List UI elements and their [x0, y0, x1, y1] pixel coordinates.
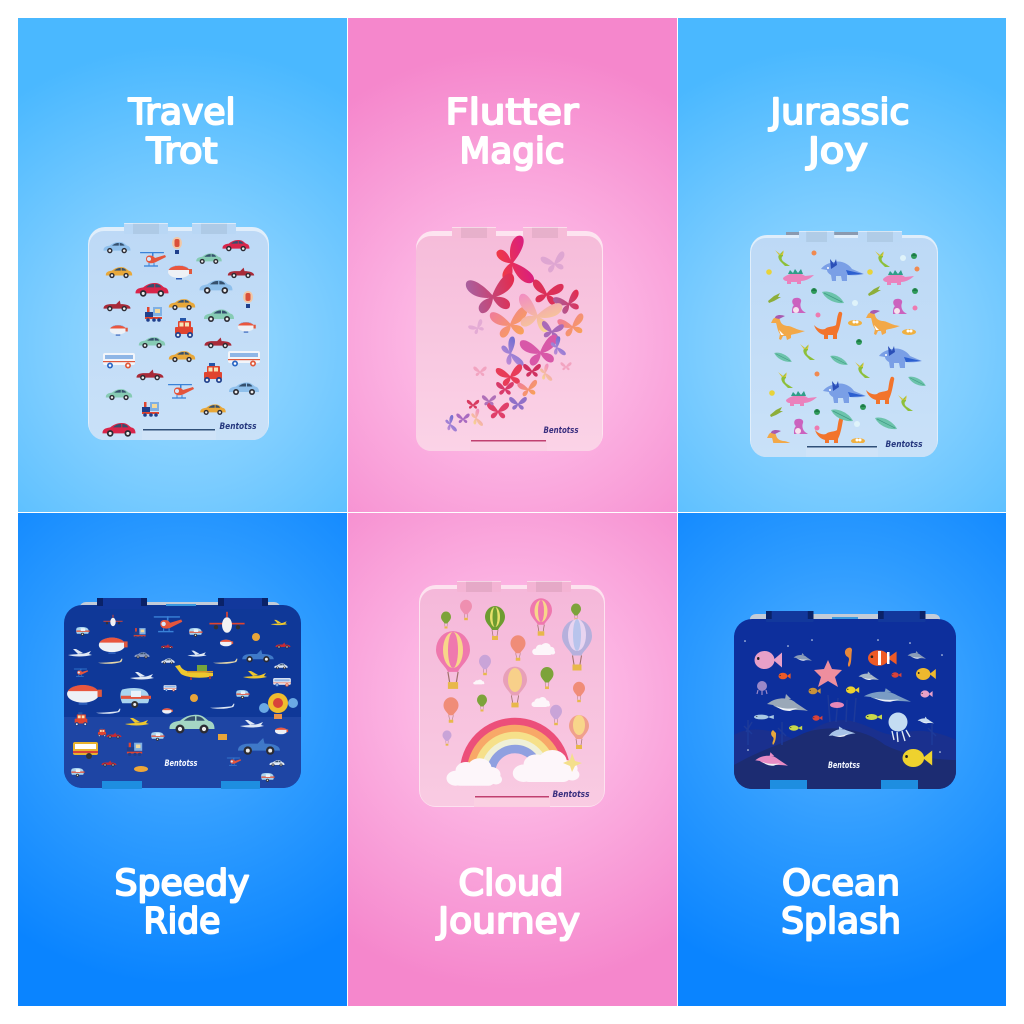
logo: Bentotss — [164, 759, 198, 769]
lunch box: Jurassic Joy — [750, 231, 938, 457]
heading: Cloud Journey — [436, 863, 580, 942]
logo: Bentotss — [886, 440, 923, 450]
heading: Travel Trot: Travel — [128, 92, 236, 133]
logo: Bentotss — [544, 426, 579, 436]
heading: Flutter Magic — [446, 92, 579, 172]
panel: Flutter Magic — [348, 18, 677, 512]
heading: Cloud Journey: Cloud — [458, 863, 564, 904]
dinosaur pattern — [766, 250, 926, 455]
heading: Ocean Splash — [781, 863, 901, 942]
logo: Bentotss — [828, 761, 860, 771]
vehicle pattern — [102, 237, 260, 437]
butterfly pattern — [444, 235, 587, 433]
panel: Travel Trot — [18, 18, 347, 512]
heading: Ocean Splash: Ocean — [782, 863, 900, 904]
vehicle and aircraft pattern — [67, 612, 298, 782]
heading: Jurassic Joy: Jurassic — [768, 92, 910, 133]
logo: Bentotss — [220, 422, 257, 432]
seabed — [734, 695, 956, 790]
panel: Cloud Journey — [348, 513, 677, 1006]
heading: Speedy Ride — [114, 863, 250, 942]
lunch box: Ocean Splash — [734, 611, 956, 790]
logo: Bentotss — [552, 790, 590, 800]
heading: Flutter Magic: Flutter — [446, 92, 579, 133]
heading: Travel Trot: Trot — [145, 131, 218, 172]
heading: Cloud Journey: Journey — [436, 901, 580, 942]
heading: Flutter Magic: Magic — [460, 131, 564, 172]
lunch box: Travel Trot — [88, 223, 269, 440]
sea creatures pattern — [744, 639, 943, 767]
heading: Speedy Ride: Speedy — [114, 863, 250, 904]
heading: Jurassic Joy: Joy — [806, 131, 868, 172]
heading: Ocean Splash: Splash — [781, 901, 901, 942]
panel: Ocean Splash — [678, 513, 1006, 1006]
lunch box: Speedy Ride — [64, 598, 301, 789]
heading: Jurassic Joy — [768, 92, 910, 172]
panel: Speedy Ride — [18, 513, 347, 1006]
lunch box: Flutter Magic — [416, 227, 603, 451]
panel: Jurassic Joy — [678, 18, 1006, 512]
hot air balloons — [436, 598, 592, 749]
lunch box: Cloud Journey — [419, 581, 605, 807]
heading: Travel Trot — [128, 92, 236, 172]
rainbow — [464, 722, 566, 773]
heading: Speedy Ride: Ride — [144, 901, 220, 942]
clouds — [446, 643, 582, 786]
